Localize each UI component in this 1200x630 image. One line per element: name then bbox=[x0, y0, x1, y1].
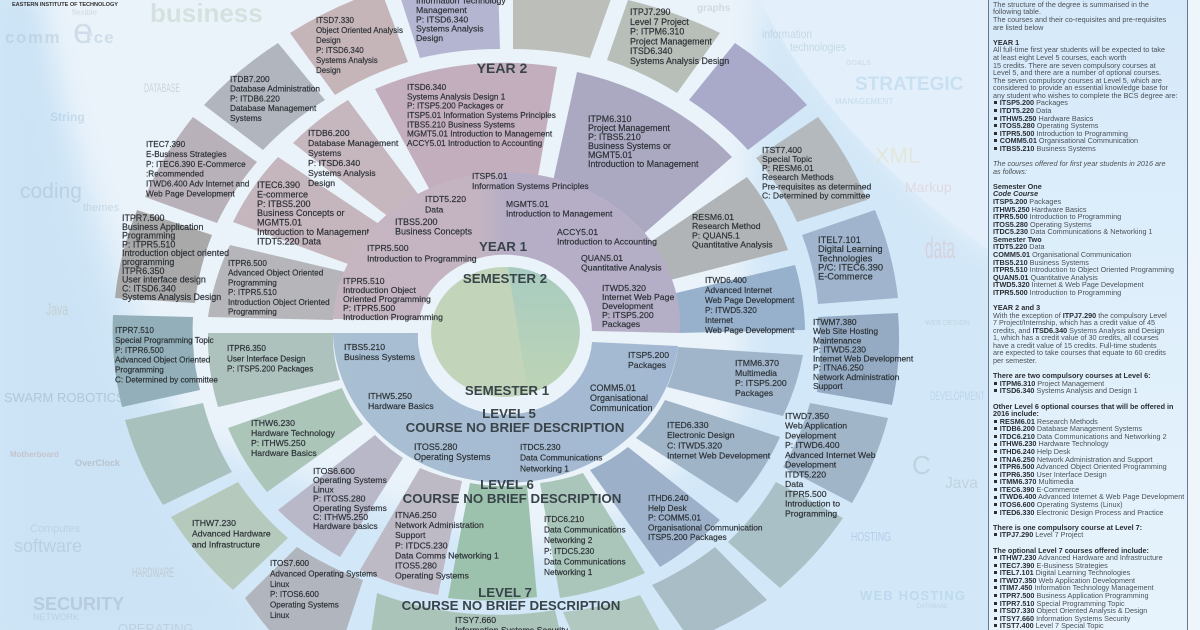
level 7: ITPR7.510: ITPR7.510 bbox=[115, 326, 154, 335]
ITDC5.230: Data Communications bbox=[520, 453, 602, 463]
level 6: ITHD6.240: ITSP5.200 Packages bbox=[648, 532, 727, 542]
right margin strip bbox=[1188, 0, 1200, 630]
level 7: ITEC7.390: :Recommended bbox=[146, 170, 204, 179]
level 7: ITWM7.380: Support bbox=[813, 381, 843, 391]
level 6: ITPR6.350: P: ITSP5.200 Packages bbox=[227, 365, 313, 374]
level 6: ITDC6.210: Networking 1 bbox=[544, 567, 593, 577]
level 6: ITPM6.310: Introduction to Management bbox=[588, 159, 699, 169]
level 6: ITPM6.310: Business Systems or bbox=[588, 141, 671, 151]
level 7: ITPR7.500: P: ITPR5.510 bbox=[122, 239, 175, 249]
word cloud background: WEB DESIGN bbox=[925, 320, 970, 327]
level 6: ITSD6.340: ACCY5.01 Introduction to Accounting bbox=[407, 139, 543, 148]
level 6: ITDB6.200: ITDB6.200 bbox=[308, 128, 350, 138]
level 7: ITSD7.330: Object Oriented Analysis bbox=[316, 26, 403, 35]
word cloud background: HARDWARE bbox=[132, 564, 174, 580]
ITBS5.200: Business Concepts bbox=[395, 226, 473, 236]
level 6: ITPR6.350 bbox=[208, 333, 340, 407]
word cloud background: GOALS bbox=[846, 60, 871, 67]
level 7: ITIM7.450: Systems Analysis bbox=[416, 24, 484, 34]
level 7: ITWD7.350: Data bbox=[785, 479, 804, 489]
ACCY5.01: Introduction to Accounting bbox=[557, 237, 657, 247]
level 6: ITOS6.600: P: ITOS5.280 bbox=[313, 494, 366, 504]
word cloud background: DATABASE bbox=[917, 604, 948, 610]
level 6: ITOS6.600: Hardware basics bbox=[313, 521, 378, 531]
word cloud background: software bbox=[14, 536, 82, 556]
level 6: ITPM6.310: MGMT5.01 bbox=[588, 150, 632, 160]
level 7: ITEL7.101 bbox=[802, 210, 898, 304]
level 6: ITMM6.370 bbox=[667, 347, 803, 416]
level 6: ITSD6.340 bbox=[375, 63, 557, 194]
level 6: ITED6.330: Electronic Design bbox=[667, 430, 735, 440]
level 6: RESM6.01 bbox=[646, 177, 788, 280]
level 6: ITHD6.240: Organisational Communication bbox=[648, 522, 763, 532]
level 6: ITSD6.340: MGMT5.01 Introduction to Management bbox=[407, 130, 553, 139]
level 7: ITOS7.600: Linux bbox=[270, 611, 289, 620]
level 6: ITPR6.500 bbox=[208, 245, 345, 320]
level 6: ITEC6.390: Introduction to Management bbox=[257, 227, 370, 237]
level 7: ITST7.400: P: RESM6.01 bbox=[762, 163, 814, 173]
level 6: ITHD6.240: P: COMM5.01 bbox=[648, 512, 701, 522]
word cloud background: Computes bbox=[30, 523, 81, 535]
level 7: ITPJ7.290: Level 7 Project bbox=[630, 17, 689, 27]
level 7: ITWM7.380 bbox=[813, 313, 914, 405]
ITWD5.320: Packages bbox=[602, 319, 641, 329]
level 6: ITOS6.600: C: ITHW5.250 bbox=[313, 512, 368, 522]
level 6: ITMM6.370: Packages bbox=[735, 388, 774, 398]
ITWD5.320: Development bbox=[602, 301, 654, 311]
word cloud background: SECURITY bbox=[33, 594, 124, 614]
level 7: ITHW7.230: and Infrastructure bbox=[192, 539, 260, 549]
ITBS5.200: ITBS5.200 bbox=[395, 217, 438, 227]
level 7: ITSD7.330: Design bbox=[316, 36, 341, 45]
level 6: ITNA6.250: ITOS5.280 bbox=[395, 560, 437, 570]
level 6: ITPR6.500: ITPR6.500 bbox=[228, 259, 267, 268]
level 6: ITDB6.200: Database Management bbox=[308, 138, 399, 148]
ITPR5.510: Introduction Programming bbox=[343, 312, 443, 322]
level 6: ITED6.330: Internet Web Development bbox=[667, 451, 771, 461]
level 7: ITWD7.350: ITPR5.500 bbox=[785, 489, 827, 499]
ITDT5.220: ITDT5.220 bbox=[425, 194, 466, 204]
word cloud background: Markup bbox=[905, 179, 952, 195]
level 6: ITNA6.250 bbox=[360, 468, 499, 595]
level 6: ITSD6.340: ITSP5.01 Information Systems Principles bbox=[407, 111, 556, 120]
level 5 semester 1 band bbox=[333, 333, 678, 483]
level 7: ITPR7.510: P: ITPR6.500 bbox=[115, 346, 164, 355]
level 6: ITDB6.200: Systems bbox=[308, 148, 342, 158]
level 6: ITDB6.200: Design bbox=[308, 178, 335, 188]
level 6: ITWD6.400: Advanced Internet bbox=[705, 286, 773, 295]
ITBS5.210: Business Systems bbox=[344, 352, 416, 362]
word cloud background: DEVELOPMENT bbox=[930, 389, 985, 403]
level 6: ITDC6.210 bbox=[540, 473, 645, 598]
level 7: ITWM7.380: Internet Web Development bbox=[813, 354, 914, 364]
level 6: ITEC6.390: ITDT5.220 Data bbox=[257, 236, 321, 246]
word cloud background: themes bbox=[83, 202, 120, 214]
level 7: ITST7.400: Special Topic bbox=[762, 154, 813, 164]
level 7: ITOS7.600: Linux bbox=[270, 580, 289, 589]
ITSP5.01: Information Systems Principles bbox=[472, 181, 589, 191]
level 7: ITWD7.350: Development bbox=[785, 430, 837, 440]
level 6: ITPM6.310: ITPM6.310 bbox=[588, 114, 631, 124]
level 7: ITDB7.200: ITDB7.200 bbox=[230, 74, 270, 84]
level 7: ITOS7.600: P: ITOS6.600 bbox=[270, 590, 319, 599]
level 7: blank grey sector bbox=[513, 0, 612, 58]
level 6: ITDB6.200: Systems Analysis bbox=[308, 168, 376, 178]
level 6: ITPR6.500: Advanced Object Oriented bbox=[228, 269, 323, 278]
level 7: ITDB7.200: P: ITDB6.220 bbox=[230, 93, 280, 103]
level 7: ITPJ7.290: ITPJ7.290 bbox=[630, 7, 671, 17]
ITHW5.250: Hardware Basics bbox=[368, 401, 434, 411]
word cloud background: STRATEGIC bbox=[855, 74, 964, 95]
ITPR5.500: Introduction to Programming bbox=[367, 253, 477, 263]
level 6: ITSD6.340: ITBS5.210 Business Systems bbox=[407, 120, 515, 129]
level 7: ITIM7.450: P: ITSD6.340 bbox=[416, 14, 468, 24]
level 7: ITWD7.350 bbox=[783, 403, 888, 518]
MGMT5.01: Introduction to Management bbox=[506, 208, 613, 218]
level 7: ITWD7.350: Development bbox=[785, 460, 837, 470]
ITSP5.01: ITSP5.01 bbox=[472, 171, 508, 181]
level 6: ITHW6.230: Hardware Technology bbox=[251, 428, 336, 438]
level 6: ITSD6.340: P: ITSP5.200 Packages or bbox=[407, 102, 504, 111]
level 7: ITPR7.510: Advanced Object Oriented bbox=[115, 356, 210, 365]
ITSP5.200: Packages bbox=[628, 360, 667, 370]
level 6: ITPR6.500: Programming bbox=[228, 308, 277, 316]
level 7: ITPR7.500: C: ITSD6.340 bbox=[122, 283, 176, 293]
level 6: ITEC6.390: MGMT5.01 bbox=[257, 218, 302, 228]
level 6: ITOS6.600: Linux bbox=[313, 484, 334, 494]
level 6: ITHW6.230: P: ITHW5.250 bbox=[251, 438, 306, 448]
level 7: ITWM7.380: Network Administration bbox=[813, 372, 900, 382]
level 7: ITST7.400 bbox=[756, 117, 872, 222]
level 6: ITWD6.400: ITWD6.400 bbox=[705, 276, 747, 285]
level 7: ITPR7.510: Programming bbox=[115, 366, 164, 375]
level 7: ITPR7.500: Systems Analysis Design bbox=[122, 292, 221, 302]
ITPR5.510: P: ITPR5.500 bbox=[343, 303, 395, 313]
word cloud background: data bbox=[925, 232, 955, 265]
word cloud background: Motherboard bbox=[10, 450, 59, 459]
heading: semester 1: SEMESTER 1 bbox=[465, 383, 550, 398]
ITDT5.220: Data bbox=[425, 205, 444, 215]
level 6: ITED6.330: C: ITWD5.320 bbox=[667, 440, 722, 450]
level 6: RESM6.01: P: QUAN5.1 bbox=[692, 230, 740, 240]
word cloud background: flexible bbox=[72, 8, 97, 17]
heading: level 5 course description: COURSE NO BRIEF DESCRIPTION bbox=[406, 420, 624, 435]
level 7: ITSD7.330: P: ITSD6.340 bbox=[316, 46, 364, 55]
level 6: ITDC6.210: Data Communications bbox=[544, 525, 626, 535]
level 7: ITWD7.350: ITWD7.350 bbox=[785, 411, 829, 421]
level 6: ITPR6.500: P: ITPR5.510 bbox=[228, 288, 277, 297]
level 6: ITMM6.370: Multimedia bbox=[735, 368, 777, 378]
COMM5.01: COMM5.01 bbox=[590, 383, 636, 393]
level 6: ITSD6.340: ITSD6.340 bbox=[407, 83, 447, 92]
word cloud background: NETWORK bbox=[33, 612, 79, 622]
level 7: blank sector bottom right bbox=[652, 547, 767, 630]
word cloud background: information bbox=[762, 27, 812, 41]
level 6: ITOS6.600: ITOS6.600 bbox=[313, 466, 355, 476]
level 7: ITWD7.350: Web Application bbox=[785, 421, 847, 431]
ITWD5.320: ITWD5.320 bbox=[602, 283, 646, 293]
level 7: ITIM7.450 bbox=[398, 0, 506, 58]
ITPR5.500: ITPR5.500 bbox=[367, 243, 409, 253]
level 6: ITNA6.250: P: ITDC5.230 bbox=[395, 540, 448, 550]
level 6: ITPM6.310 bbox=[552, 72, 732, 237]
level 7: ITSD7.330: ITSD7.330 bbox=[316, 16, 355, 25]
word cloud background: DATABASE bbox=[144, 81, 180, 95]
level 7: ITWM7.380: P: ITWD5.230 bbox=[813, 344, 866, 354]
level 6: RESM6.01: RESM6.01 bbox=[692, 212, 734, 222]
heading: level 5: LEVEL 5 bbox=[482, 406, 536, 421]
level 6: ITHD6.240 bbox=[590, 447, 763, 567]
word cloud background: technologies bbox=[790, 40, 846, 54]
level 7: ITST7.400: C: Determined by committee bbox=[762, 190, 871, 200]
level 6: ITOS6.600: Operating Systems bbox=[313, 475, 388, 485]
ITDC5.230: ITDC5.230 bbox=[520, 442, 561, 452]
level 7: ITHW7.230: ITHW7.230 bbox=[192, 518, 236, 528]
level 7: ITWM7.380: ITWM7.380 bbox=[813, 317, 857, 327]
ITPR5.510: Oriented Programming bbox=[343, 294, 431, 304]
level 7: ITST7.400: Pre-requisites as determined bbox=[762, 181, 872, 191]
level 6: ITNA6.250: ITNA6.250 bbox=[395, 510, 437, 520]
level 7: ITWD7.350: Programming bbox=[785, 508, 837, 518]
level 7: ITOS7.600: ITOS7.600 bbox=[270, 559, 309, 568]
level 7: ITPJ7.290: P: ITPM6.310 bbox=[630, 27, 684, 37]
word cloud background: comm bbox=[5, 28, 61, 47]
ITBS5.210: ITBS5.210 bbox=[344, 342, 385, 352]
level 7: ITEL7.101: Digital Learning bbox=[818, 244, 883, 254]
level 7: ITEC7.390: E-Business Strategies bbox=[146, 150, 227, 159]
level 6: ITPR6.350: ITPR6.350 bbox=[227, 344, 266, 353]
level 7: ITOS7.600 bbox=[245, 547, 377, 630]
word cloud background: WEB HOSTING bbox=[860, 588, 965, 603]
level 6: ITDC6.210: Networking 2 bbox=[544, 535, 593, 545]
word cloud background: SWARM ROBOTICS bbox=[4, 390, 125, 405]
level 7: ITSD7.330: Design bbox=[316, 66, 341, 75]
level 7: ITSY7.660 bbox=[370, 593, 569, 630]
level 7: ITHW7.230: Advanced Hardware bbox=[192, 529, 271, 539]
level 7: ITSY7.660: ITSY7.660 bbox=[455, 615, 496, 625]
level 7: blank teal sector bbox=[125, 403, 232, 505]
level 7: ITEC7.390: ITWD6.400 Adv Internet and bbox=[146, 180, 250, 189]
level 6: ITHW6.230 bbox=[228, 388, 363, 492]
word cloud background: String bbox=[50, 110, 85, 124]
word cloud background: coding bbox=[20, 180, 82, 203]
level 6: ITWD6.400 bbox=[676, 265, 805, 335]
level 6: ITED6.330: ITED6.330 bbox=[667, 420, 709, 430]
level 7: ITPR7.500 bbox=[115, 210, 229, 303]
level 7: ITST7.400: Research Methods bbox=[762, 172, 834, 182]
level 7: ITWD7.350: Introduction to bbox=[785, 499, 840, 509]
level 7: ITEC7.390: Web Page Development bbox=[146, 190, 235, 198]
level 7: ITSD7.330 bbox=[290, 0, 408, 95]
level 6: ITDB6.200: P: ITSD6.340 bbox=[308, 158, 360, 168]
level 7: ITPR7.500: User interface design bbox=[122, 275, 206, 285]
level 6: ITED6.330 bbox=[636, 400, 780, 503]
level 7: ITPJ7.290: Project Management bbox=[630, 36, 712, 46]
level 6: ITWD6.400: P: ITWD5.320 bbox=[705, 306, 757, 315]
level 6: ITHW6.230: ITHW6.230 bbox=[251, 418, 295, 428]
heading: semester 2: SEMESTER 2 bbox=[463, 271, 547, 286]
level 6: ITNA6.250: Operating Systems bbox=[395, 571, 470, 581]
level 6: ITMM6.370: P: ITSP5.200 bbox=[735, 378, 787, 388]
level 6: ITHW6.230: Hardware Basics bbox=[251, 448, 317, 458]
MGMT5.01: MGMT5.01 bbox=[506, 199, 549, 209]
word cloud background: graphs bbox=[697, 3, 731, 14]
ITWD5.320: Internet Web Page bbox=[602, 292, 674, 302]
COMM5.01: Organisational bbox=[590, 393, 648, 403]
word cloud background: XML bbox=[875, 143, 920, 168]
QUAN5.01: QUAN5.01 bbox=[581, 253, 623, 263]
level 7: ITEC7.390: ITEC7.390 bbox=[146, 140, 186, 149]
level 6: ITSD6.340: Systems Analysis Design 1 bbox=[407, 92, 506, 101]
level 6: ITNA6.250: Network Administration bbox=[395, 520, 484, 530]
level 7: ITPR7.510: Special Programming Topic bbox=[115, 336, 214, 345]
level 6: ITHD6.240: ITHD6.240 bbox=[648, 493, 689, 503]
word cloud background: HOSTING bbox=[851, 529, 891, 544]
level 7: ITDB7.200: Database Administration bbox=[230, 84, 320, 94]
level 6: RESM6.01: Quantitative Analysis bbox=[692, 240, 773, 250]
heading: level 6: LEVEL 6 bbox=[480, 477, 534, 492]
level 6: ITPM6.310: Project Management bbox=[588, 123, 670, 133]
level 6: ITDC6.210: P: ITDC5.230 bbox=[544, 546, 595, 556]
level 6: ITHD6.240: Help Desk bbox=[648, 503, 687, 513]
level 7: ITPJ7.290 bbox=[607, 0, 729, 93]
level 7: ITHW7.230 bbox=[171, 482, 288, 590]
level 6: ITDC6.210: ITDC6.210 bbox=[544, 514, 585, 524]
level 7: ITWM7.380: P: ITNA6.250 bbox=[813, 363, 864, 373]
level 7: ITPJ7.290: ITSD6.340 bbox=[630, 46, 672, 56]
level 6: ITEC6.390: P: ITBS5.200 bbox=[257, 199, 311, 209]
level 7: ITEL7.101: E-Commerce bbox=[818, 272, 873, 282]
ITOS5.280: ITOS5.280 bbox=[414, 442, 457, 452]
level 7: ITPR7.500: programming bbox=[122, 257, 174, 267]
ACCY5.01: ACCY5.01 bbox=[557, 227, 598, 237]
ITPR5.510: ITPR5.510 bbox=[343, 276, 385, 286]
panel: degree structure text: The structure of the degree is summarised in the following table. The courses and their co-requisites and pre-requisites are listed below YEAR 1 All full-time first year students will be expected to take at least eight Level 5 courses, each worth 15 credits. There are seven compulsory courses at Level 5, and there are a number of optional courses. The seven compulsory courses at Level 5, which are considered to provide an essential knowledge base for any student who wishes to complete the BCS degree are: ITSP5.200 Packages ITDT5.220 Data ITHW5.250 Hardware Basics ITOS5.280 Operating Systems ITPR5.500 Introduction to Programming COMM5.01 Organisational Communication ITBS5.210 Business Systems The courses offered for first year students in 2016 are as follows: Semester One Code Course ITSP5.200 Packages ITHW5.250 Hardware Basics ITPR5.500 Introduction to Programming ITOS5.280 Operating Systems ITDC5.230 Data Communications & Networking 1 Semester Two ITDT5.220 Data COMM5.01 Organisational Communication ITBS5.210 Business Systems ITPR5.510 Introduction to Object Oriented Programming QUAN5.01 Quantitative Analysis ITWD5.320 Internet & Web Page Development ITPR5.500 Introduction to Programming YEAR 2 and 3 With the exception of ITPJ7.290 the compulsory Level 7 Project/Internship, which has a credit value of 45 credits, and ITSD6.340 Systems Analysis and Design 1, which has a credit value of 30 credits, all courses have a credit value of 15 credits. Full-time students are expected to take courses that equate to 60 credits per semester. There are two compulsory courses at Level 6: ITPM6.310 Project Management ITSD6.340 Systems Analysis and Design 1 Other Level 6 optional courses that will be offered in 2016 include: RESM6.01 Research Methods ITDB6.200 Database Management Systems ITDC6.210 Data Communications and Networking 2 ITHW6.230 Hardware Technology ITHD6.240 Help Desk ITNA6.250 Network Administration and Support ITPR6.500 Advanced Object Oriented Programming ITPR6.350 User Interface Design ITMM6.370 Multimedia ITEC6.390 E-Commerce ITWD6.400 Advanced Internet & Web Page Development ITOS6.600 Operating Systems (Linux) ITED6.330 Electronic Design Process and Practice There is one compulsory course at Level 7: ITPJ7.290 Level 7 Project The optional Level 7 courses offered include: ITHW7.230 Advanced Hardware and Infrastructure ITEC7.390 E-Business Strategies ITEL7.101 Digital Learning Technologies ITWD7.350 Web Application Development ITIM7.450 Information Technology Management ITPR7.500 Business Application Programming ITPR7.510 Special Programming Topic ITSD7.330 Object Oriented Analysis & Design ITSY7.660 Information Systems Security ITST7.400 Level 7 Special Topic bbox=[993, 0, 1184, 630]
level 6: ITWD6.400: Internet bbox=[705, 316, 734, 325]
level 7: ITPJ7.290: Systems Analysis Design bbox=[630, 56, 729, 66]
ITPR5.510: Introduction Object bbox=[343, 285, 417, 295]
word cloud background: rce bbox=[86, 28, 115, 47]
level 6: ITDB6.200 bbox=[293, 100, 421, 218]
level 7: ITPR7.510 bbox=[113, 315, 218, 407]
QUAN5.01: Quantitative Analysis bbox=[581, 262, 662, 272]
level 7: ITEL7.101: P/C: ITEC6.390 bbox=[818, 263, 883, 273]
level 6: ITEC6.390: E-commerce bbox=[257, 189, 308, 199]
level 6: ITWD6.400: Web Page Development bbox=[705, 326, 795, 335]
level 7: blank sector lower right bbox=[728, 482, 843, 588]
level 7: ITPR7.500: ITPR7.500 bbox=[122, 213, 164, 223]
word cloud background: C bbox=[912, 450, 931, 480]
level 7: ITPR7.500: Introduction object oriented bbox=[122, 248, 229, 258]
level 7: ITEC7.390 bbox=[145, 117, 257, 223]
level 6: ITOS6.600 bbox=[278, 435, 403, 557]
level 7: ITPR7.500: Business Application bbox=[122, 222, 203, 232]
level 7: ITWD7.350: ITDT5.220 bbox=[785, 469, 826, 479]
level 6: ITNA6.250: Support bbox=[395, 530, 426, 540]
level 5 semester 2 band bbox=[333, 171, 680, 333]
heading: level 6 course description: COURSE NO BRIEF DESCRIPTION bbox=[403, 491, 621, 506]
level 6: ITMM6.370: ITMM6.370 bbox=[735, 358, 779, 368]
level 6: ITPM6.310: P: ITBS5.210 bbox=[588, 132, 641, 142]
ITOS5.280: Operating Systems bbox=[414, 452, 491, 462]
level 6: ITOS6.600: Operating Systems bbox=[313, 503, 388, 513]
level 7: ITPR7.500: ITPR6.350 bbox=[122, 266, 164, 276]
COMM5.01: Communication bbox=[590, 403, 653, 413]
level 7: blank purple sector bbox=[689, 43, 807, 150]
level 6: RESM6.01: Research Method bbox=[692, 221, 761, 231]
level 6: ITEC6.390: Business Concepts or bbox=[257, 208, 345, 218]
ITDC5.230: Networking 1 bbox=[520, 464, 569, 474]
level 6: ITNA6.250: Data Comms Networking 1 bbox=[395, 550, 499, 560]
level 7: ITOS7.600: Operating Systems bbox=[270, 601, 339, 610]
level 7: blank sector bottom bbox=[563, 595, 665, 630]
word cloud background: Java bbox=[945, 475, 978, 492]
level 6: ITEC6.390 bbox=[233, 157, 382, 264]
heading: year 2: YEAR 2 bbox=[477, 60, 527, 76]
level 6: ITPR6.500: Introduction Object Oriented bbox=[228, 298, 330, 307]
institute name: EASTERN INSTITUTE OF TECHNOLOGY bbox=[12, 2, 118, 8]
level 7: ITEC7.390: P: ITEC6.390 E-Commerce bbox=[146, 160, 246, 169]
word cloud background: Java bbox=[46, 300, 68, 319]
centre circle bbox=[431, 267, 580, 397]
level 7: ITDB7.200 bbox=[204, 43, 325, 150]
level 6: ITDC6.210: Data Communications bbox=[544, 556, 626, 566]
level 7: ITEL7.101: ITEL7.101 bbox=[818, 235, 861, 245]
level 6: ITPR6.350: User Interface Design bbox=[227, 354, 306, 363]
level 7: ITWD7.350: Advanced Internet Web bbox=[785, 450, 876, 460]
ITWD5.320: P: ITSP5.200 bbox=[602, 310, 654, 320]
level 7: ITPR7.500: Programming bbox=[122, 231, 175, 241]
level 7: ITDB7.200: Systems bbox=[230, 113, 262, 123]
word cloud background: e bbox=[73, 10, 93, 51]
word cloud background: MANAGEMENT bbox=[835, 97, 893, 106]
level 7: ITWM7.380: Maintenance bbox=[813, 335, 862, 345]
level 7: ITIM7.450: Design bbox=[416, 33, 443, 43]
level 7: ITSD7.330: Systems Analysis bbox=[316, 56, 378, 65]
level 7: ITDB7.200: Database Management bbox=[230, 103, 317, 113]
level 7: ITST7.400: ITST7.400 bbox=[762, 145, 802, 155]
ITSP5.200: ITSP5.200 bbox=[628, 350, 669, 360]
level 6: ITEC6.390: ITEC6.390 bbox=[257, 180, 300, 190]
word cloud background: OverClock bbox=[75, 458, 121, 468]
level 6: ITWD6.400: Web Page Development bbox=[705, 296, 795, 305]
level 7: ITPR7.510: C: Determined by committee bbox=[115, 376, 218, 384]
ITHW5.250: ITHW5.250 bbox=[368, 391, 412, 401]
heading: level 7 course description: COURSE NO BRIEF DESCRIPTION bbox=[402, 598, 620, 613]
level 7: ITWM7.380: Web Site Hosting bbox=[813, 326, 878, 336]
heading: level 7: LEVEL 7 bbox=[478, 585, 532, 600]
heading: year 1: YEAR 1 bbox=[479, 239, 528, 254]
level 7: ITEL7.101: Technologies bbox=[818, 253, 873, 263]
level 7: ITWD7.350: P: ITWD6.400 bbox=[785, 440, 840, 450]
level 7: ITOS7.600: Advanced Operating Systems bbox=[270, 569, 377, 578]
level 6: blank green sector bbox=[448, 483, 537, 601]
level 7: ITIM7.450: Management bbox=[416, 5, 467, 15]
level 6: ITPR6.500: Programming bbox=[228, 278, 277, 287]
